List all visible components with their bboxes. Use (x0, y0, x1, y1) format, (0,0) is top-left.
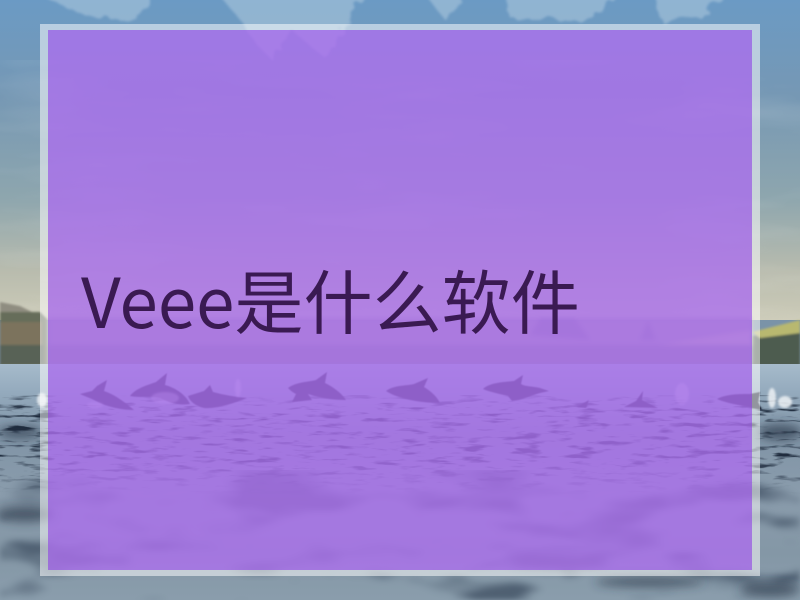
soft foreground swell (0, 470, 800, 600)
purple panel (48, 30, 752, 570)
clouds (0, 60, 800, 320)
dolphins leaping (80, 372, 762, 410)
dark swell patches (0, 424, 800, 597)
dolphin 8 (624, 391, 658, 408)
water ripples (0, 395, 800, 495)
dolphin 2 (130, 373, 190, 405)
snowy mountains (40, 0, 725, 60)
dolphin 4 (288, 372, 346, 402)
water splashes (37, 379, 792, 408)
distant forest shore (0, 302, 800, 366)
dolphin 6 (483, 375, 549, 401)
dolphin 5 (386, 378, 440, 403)
sky (0, 0, 800, 320)
dolphin 1 (80, 380, 134, 410)
shore seen through the panel (48, 318, 752, 365)
dolphin 3 (188, 385, 247, 408)
dolphin 9 (717, 392, 762, 410)
sea (0, 364, 800, 600)
dolphin 7 fin (577, 400, 589, 408)
